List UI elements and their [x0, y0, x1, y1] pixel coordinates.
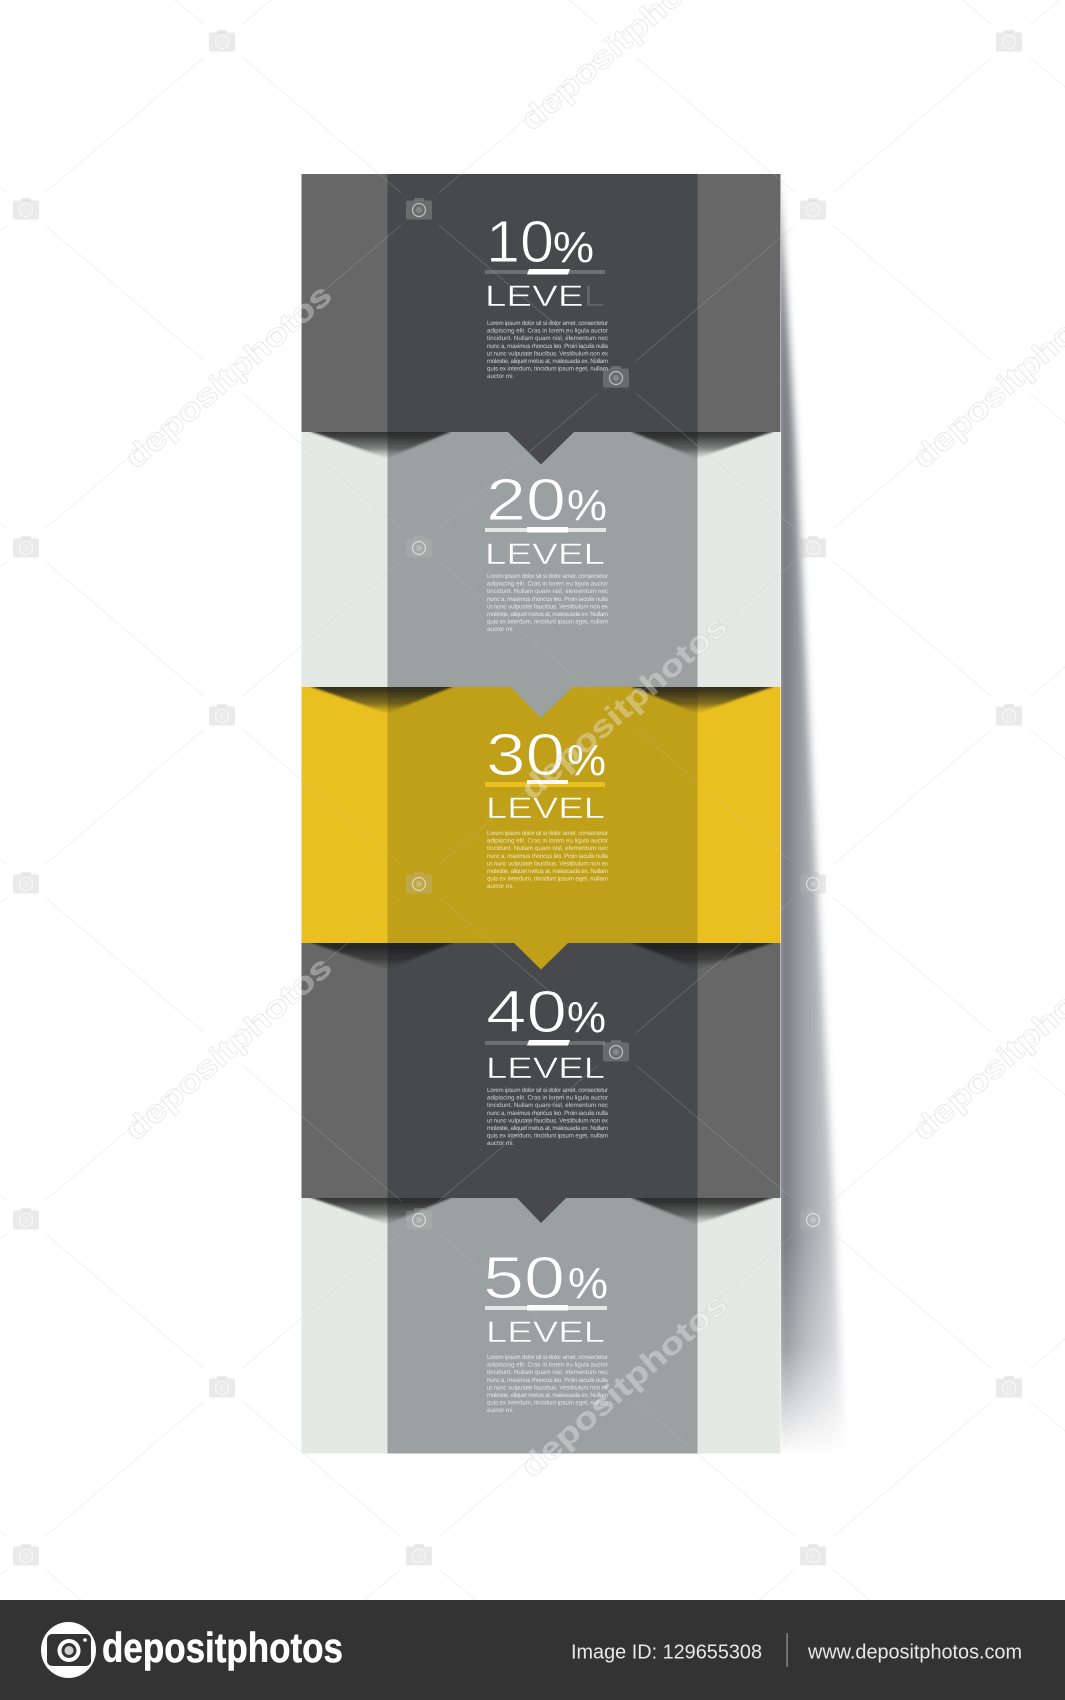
content: 40% level: Lorem ipsum dolor sit si dolor amet, consectetur	[487, 1087, 608, 1094]
arrow: 20% to 30%	[511, 687, 573, 718]
content: 30% level: auctor mi.	[487, 883, 514, 890]
content: 20% level: quis ex interdum, tincidunt ipsum eget, nullam	[487, 619, 608, 626]
content: 10% level	[485, 209, 609, 380]
content: 20% level: ut nunc vulputate faucibus. Vestibulum non ex	[487, 603, 609, 610]
content: 40% level: molestie, aliquet metus at, malesuada ex. Nullam	[487, 1125, 608, 1132]
content: 30% level: %	[567, 736, 606, 785]
footer logo wordmark: depositphotos	[102, 1624, 343, 1671]
content: 40% level	[485, 979, 609, 1147]
content: 30% level: Lorem ipsum dolor sit si dolor amet, consectetur	[487, 830, 608, 837]
content: 10% level: auctor mi.	[487, 373, 514, 380]
content: 50% level: nunc a, maximus rhoncus leo. Proin iaculis nulla	[487, 1377, 609, 1384]
watermark: diagonal wordmarks	[118, 0, 1065, 1484]
content: 20% level	[485, 467, 609, 633]
content: 20% level: auctor mi.	[487, 626, 514, 633]
content: 10% level: nunc a, maximus rhoncus leo. Proin iaculis nulla	[487, 343, 609, 350]
content: 40% level: adipiscing elit. Cras in lorem eu ligula auctor	[487, 1095, 608, 1102]
content: 50% level: %	[568, 1259, 608, 1308]
watermark: diagonal wordmarks: depositphotos	[514, 608, 734, 806]
content: 40% level: %	[567, 993, 606, 1042]
content: 10% level: Lorem ipsum dolor sit si dolor amet, consectetur	[487, 320, 608, 327]
content: 30% level: adipiscing elit. Cras in lorem eu ligula auctor	[487, 838, 608, 845]
content: 20% level: %	[567, 481, 607, 530]
content: 10% level: ut nunc vulputate faucibus. Vestibulum non ex	[487, 350, 609, 357]
content: 10% level: molestie, aliquet metus at, malesuada ex. Nullam	[487, 358, 608, 365]
content: 40% level: LEVEL	[486, 1052, 605, 1085]
content: 50% level: quis ex interdum, tincidunt ipsum eget, nullam	[487, 1400, 608, 1407]
content: 30% level	[485, 722, 609, 890]
content: 40% level: tincidunt. Nullam quam nisl, elementum nec	[487, 1102, 608, 1109]
content: 10% level: quis ex interdum, tincidunt ipsum eget, nullam	[487, 366, 608, 373]
content: 10% level: tincidunt. Nullam quam nisl, elementum nec	[487, 335, 608, 342]
content: 20% level: tincidunt. Nullam quam nisl, elementum nec	[487, 588, 608, 595]
content: 40% level: auctor mi.	[487, 1140, 514, 1147]
content: 30% level: quis ex interdum, tincidunt ipsum eget, nullam	[487, 876, 608, 883]
content: 10% level: %	[553, 223, 594, 272]
arrow: 30% to 40%	[514, 943, 568, 970]
watermark: diagonal wordmarks: depositphotos	[118, 277, 338, 475]
watermark: diagonal wordmarks: depositphotos	[514, 1286, 734, 1484]
panel: 10% level	[302, 174, 780, 432]
content: 50% level: tincidunt. Nullam quam nisl, elementum nec	[487, 1369, 608, 1376]
content: 50% level: auctor mi.	[487, 1407, 514, 1414]
content: 40% level: 40	[486, 979, 567, 1045]
arrow: 10% to 20%	[508, 432, 574, 464]
content: 50% level: molestie, aliquet metus at, malesuada ex. Nullam	[487, 1392, 608, 1399]
footer bar	[0, 1600, 1065, 1700]
content: 50% level: Lorem ipsum dolor sit si dolor amet, consectetur	[487, 1354, 608, 1361]
content: 50% level	[483, 1245, 609, 1414]
content: 40% level: nunc a, maximus rhoncus leo. Proin iaculis nulla	[487, 1110, 609, 1117]
content: 30% level: molestie, aliquet metus at, malesuada ex. Nullam	[487, 868, 608, 875]
panel: 30% level	[302, 681, 780, 943]
side drop shadow	[781, 184, 843, 1446]
content: 20% level: molestie, aliquet metus at, malesuada ex. Nullam	[487, 611, 608, 618]
content: 20% level: LEVEL	[485, 538, 605, 571]
panel: 40% level	[302, 937, 780, 1198]
content: 30% level: LEVEL	[486, 792, 605, 825]
content: 30% level: 30	[486, 722, 565, 788]
content: 50% level: ut nunc vulputate faucibus. Vestibulum non ex	[487, 1384, 609, 1391]
content: 30% level: nunc a, maximus rhoncus leo. Proin iaculis nulla	[487, 853, 609, 860]
content: 20% level: adipiscing elit. Cras in lorem eu ligula auctor	[487, 581, 608, 588]
content: 40% level: quis ex interdum, tincidunt ipsum eget, nullam	[487, 1133, 608, 1140]
website url: www.depositphotos.com	[807, 1642, 1022, 1664]
content: 10% level: 10	[486, 209, 554, 275]
content: 30% level: tincidunt. Nullam quam nisl, elementum nec	[487, 845, 608, 852]
content: 50% level: 50	[483, 1245, 565, 1311]
content: 50% level: adipiscing elit. Cras in lorem eu ligula auctor	[487, 1362, 608, 1369]
content: 10% level: LEVE L	[485, 280, 605, 313]
content: 30% level: ut nunc vulputate faucibus. Vestibulum non ex	[487, 860, 609, 867]
panel: 20% level	[302, 426, 780, 688]
content: 10% level: adipiscing elit. Cras in lorem eu ligula auctor	[487, 328, 608, 335]
content: 20% level: 20	[486, 467, 566, 533]
footer logo icon	[41, 1622, 96, 1678]
arrow: 40% to 50%	[517, 1198, 566, 1223]
content: 20% level: Lorem ipsum dolor sit si dolor amet, consectetur	[487, 573, 608, 580]
content: 20% level: nunc a, maximus rhoncus leo. Proin iaculis nulla	[487, 596, 609, 603]
panel: 50% level	[302, 1192, 780, 1454]
content: 50% level: LEVEL	[486, 1316, 605, 1349]
image id: Image ID: 129655308	[571, 1642, 762, 1664]
watermark: diagonal wordmarks: depositphotos	[118, 949, 338, 1147]
content: 40% level: ut nunc vulputate faucibus. Vestibulum non ex	[487, 1117, 609, 1124]
footer divider	[786, 1633, 788, 1667]
